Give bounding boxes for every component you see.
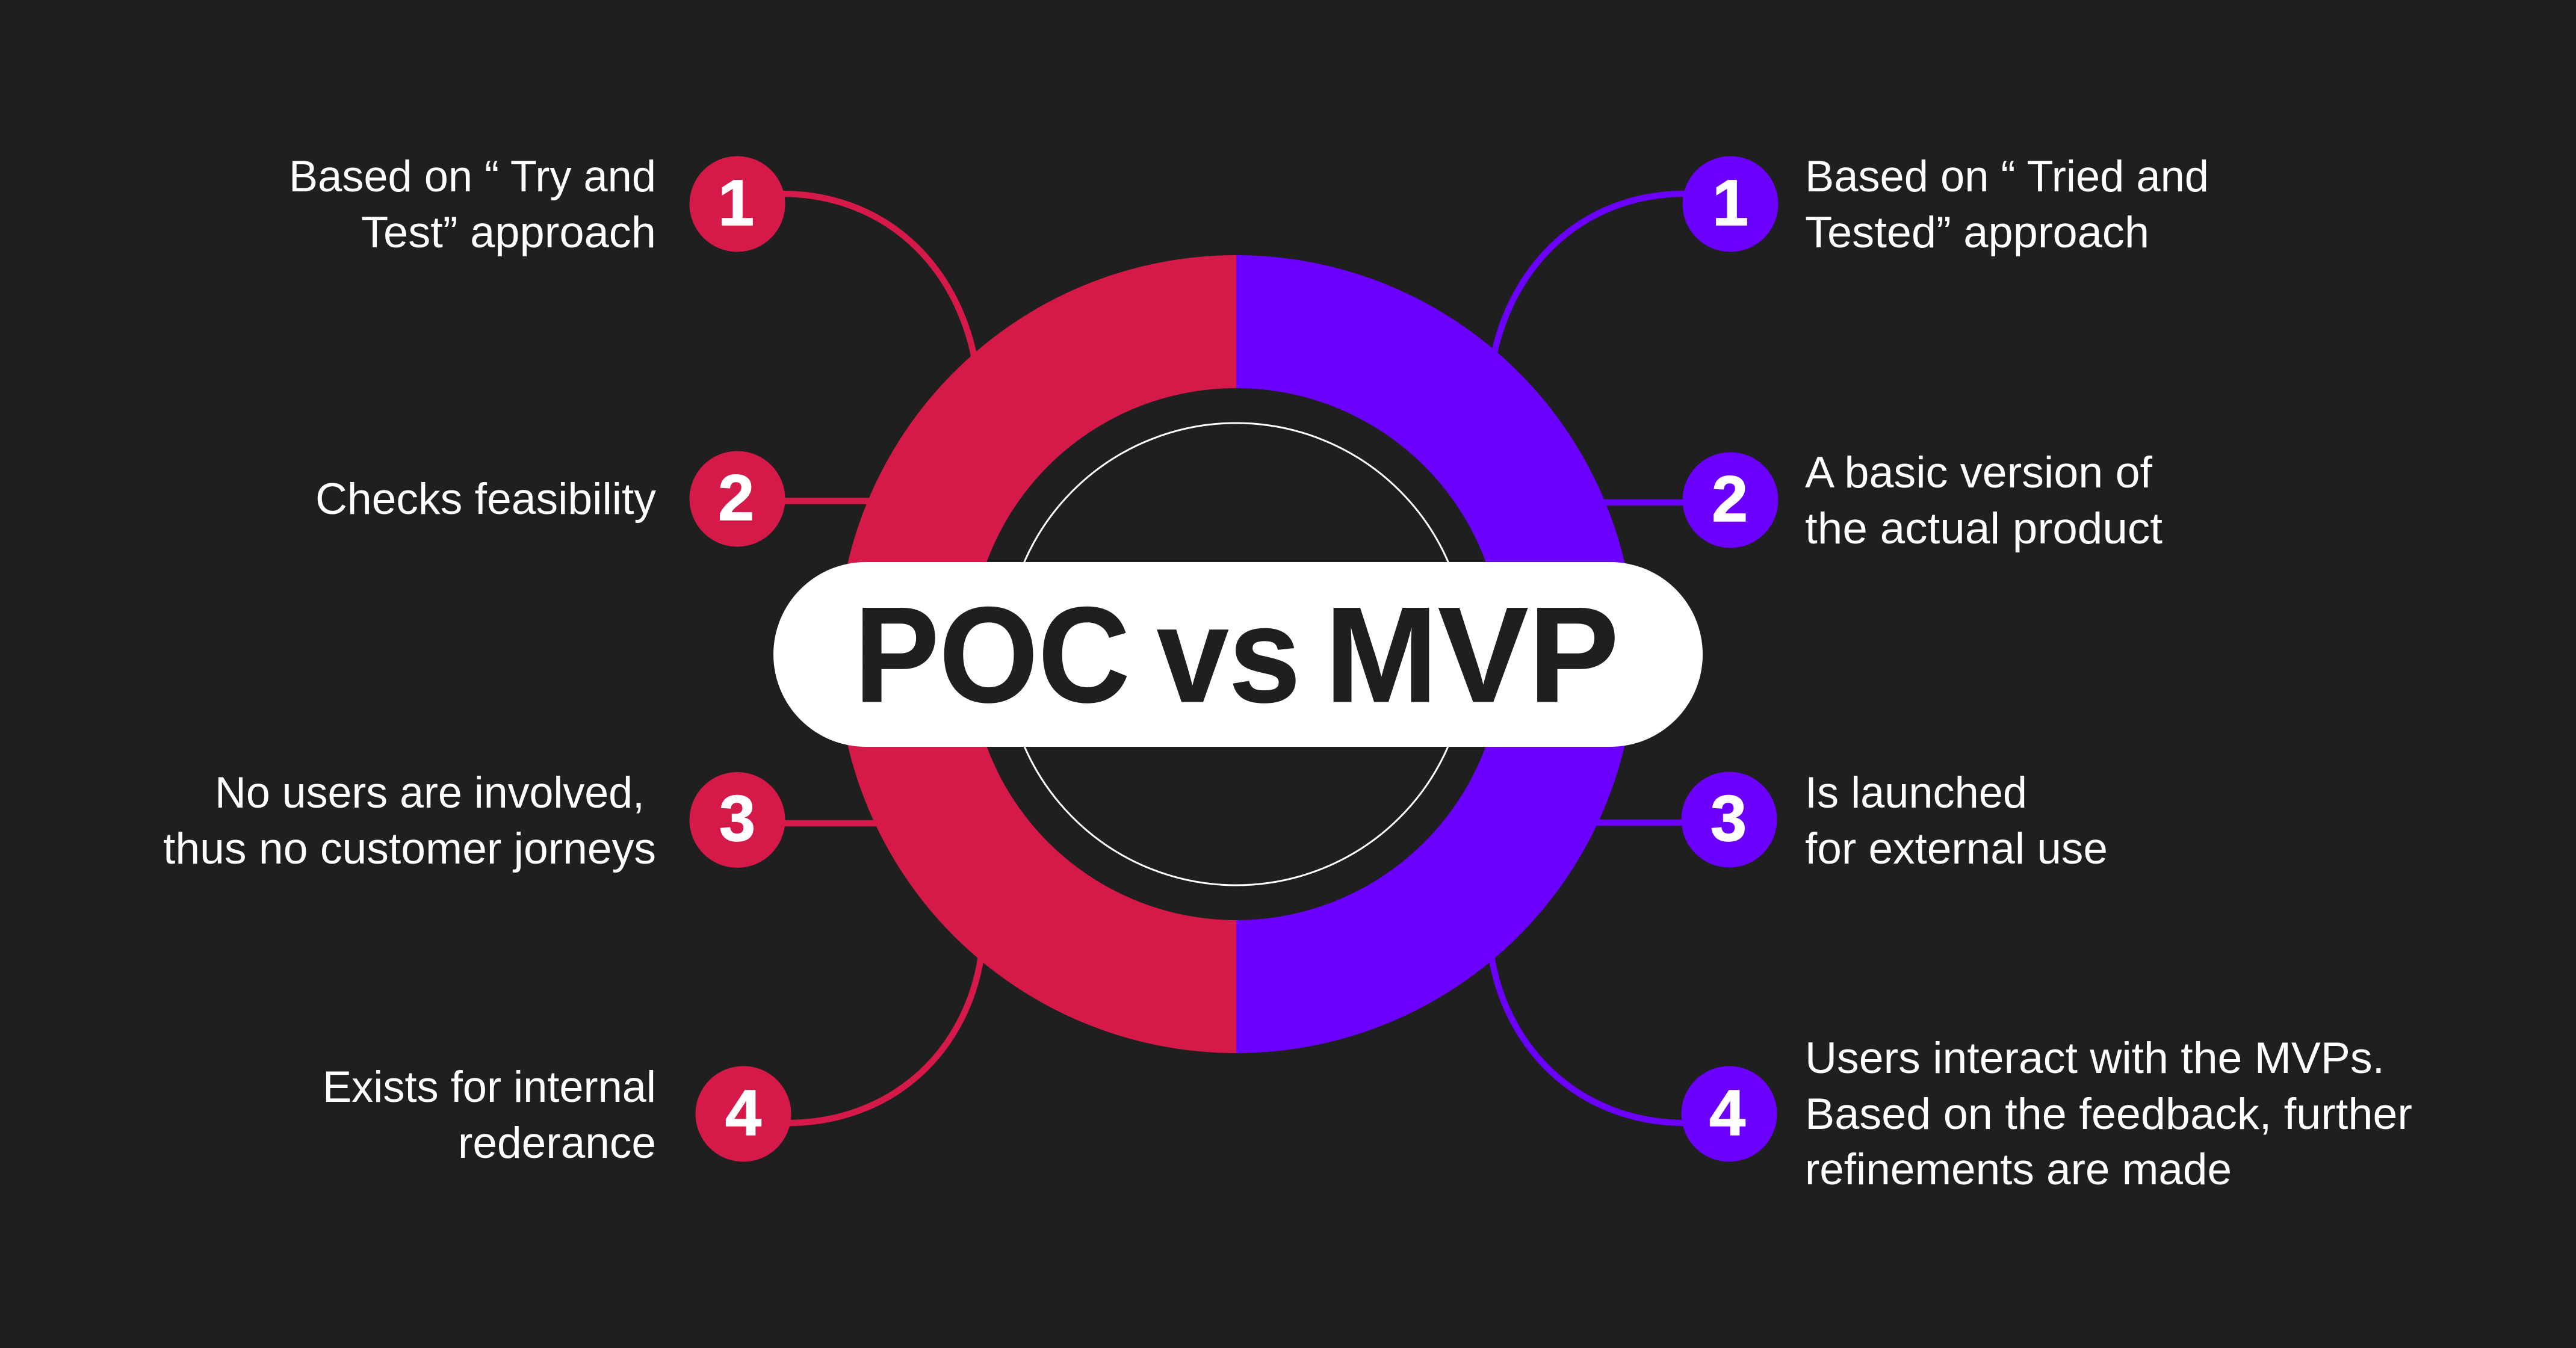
MVP item 2: 2 [1712, 462, 1748, 535]
POC item 1 [289, 151, 785, 257]
MVP item 3: Is launched [1805, 767, 2027, 817]
POC item 1: Based on “ Try and [289, 151, 656, 201]
POC item 2 [315, 451, 785, 546]
POC item 4: Exists for internal [323, 1062, 656, 1111]
connectors: MVP [1491, 194, 1685, 1123]
MVP item 4: 4 [1709, 1076, 1745, 1149]
POC item 2: 2 [718, 461, 754, 534]
POC item 4: 4 [725, 1076, 761, 1149]
MVP item 2 [1683, 447, 2163, 553]
donut ring: POC half [837, 255, 1236, 1053]
connectors: POC [781, 194, 981, 1123]
MVP item 2: the actual product [1805, 503, 2163, 553]
POC item 1: 1 [718, 166, 754, 239]
MVP item 2: A basic version of [1805, 447, 2153, 497]
POC item 3 [163, 767, 785, 873]
MVP item 1: 1 [1712, 166, 1748, 239]
MVP item 4 [1682, 1033, 2412, 1194]
MVP item 4: Users interact with the MVPs. [1805, 1033, 2385, 1083]
MVP item 3: for external use [1805, 823, 2108, 873]
title [855, 578, 1619, 731]
POC item 3: thus no customer jorneys [163, 823, 656, 873]
MVP item 1: Based on “ Tried and [1805, 151, 2209, 201]
POC item 3: No users are involved, [215, 767, 645, 817]
donut ring: MVP half [1236, 255, 1635, 1053]
MVP item 1: Tested” approach [1805, 207, 2149, 257]
POC item 3: 3 [719, 782, 755, 855]
MVP item 4: Based on the feedback, further [1805, 1089, 2412, 1139]
title: vs [1157, 578, 1301, 731]
POC item 1: Test” approach [361, 207, 656, 257]
title pill [773, 562, 1703, 747]
POC item 2: Checks feasibility [315, 474, 656, 524]
MVP item 4: refinements are made [1805, 1144, 2232, 1194]
MVP item 3: 3 [1711, 782, 1747, 855]
MVP item 3 [1682, 767, 2108, 873]
MVP item 1 [1683, 151, 2209, 257]
title: POC [855, 578, 1130, 731]
title: MVP [1325, 578, 1619, 731]
POC item 4 [323, 1062, 791, 1167]
thin inner circle [1005, 423, 1467, 885]
POC item 4: rederance [458, 1118, 656, 1167]
